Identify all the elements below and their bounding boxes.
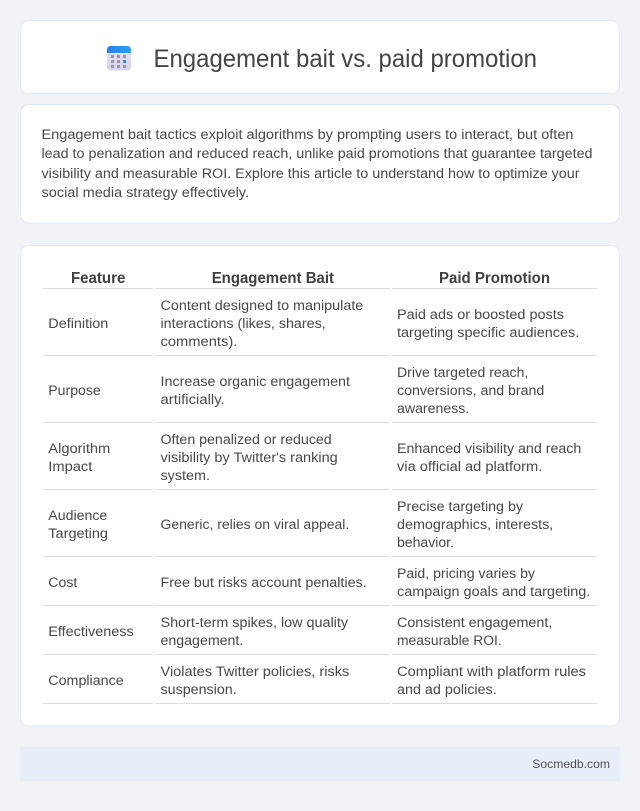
row: Effectiveness: Short-term spikes, low quality (160, 615, 349, 631)
row: Compliance: and ad policies. (397, 682, 497, 698)
footer credit: Socmedb.com (532, 757, 610, 771)
row: Algorithm Impact (43, 432, 597, 490)
row: Effectiveness: Effectiveness (48, 624, 134, 640)
intro text (42, 127, 592, 201)
row: Cost: Cost (48, 575, 77, 591)
row: Purpose (43, 365, 597, 423)
intro text: Engagement bait tactics exploit algorithms by prompting users to interact, but often (42, 127, 574, 143)
row: Effectiveness: measurable ROI. (397, 633, 502, 649)
row: Compliance: Violates Twitter policies, risks (160, 664, 349, 680)
icon: calendar (107, 46, 131, 70)
row: Definition: Paid ads or boosted posts (397, 307, 564, 323)
table header row: Paid Promotion (439, 270, 550, 287)
row: Definition: comments). (160, 334, 237, 350)
row: Cost: Free but risks account penalties. (160, 575, 367, 591)
footer (20, 747, 620, 781)
row: Audience Targeting: demographics, interests, (397, 517, 553, 533)
row: Algorithm Impact: via official ad platform. (397, 459, 542, 475)
row: Purpose: awareness. (397, 401, 469, 417)
panel: title card (20, 20, 620, 94)
row: Definition: targeting specific audiences. (397, 325, 579, 341)
row: Purpose: Drive targeted reach, (397, 365, 528, 381)
row: Audience Targeting (43, 499, 597, 557)
panel: comparison table (20, 246, 620, 726)
row: Algorithm Impact: Impact (48, 459, 92, 475)
row: Algorithm Impact: system. (160, 468, 210, 484)
row: Definition: interactions (likes, shares, (160, 316, 326, 332)
table header row (43, 270, 597, 289)
row: Compliance: Compliant with platform rules (397, 664, 586, 680)
row: Cost: Paid, pricing varies by (397, 566, 536, 582)
row: Effectiveness: engagement. (160, 633, 243, 649)
table header row: Feature (71, 270, 125, 287)
row: Algorithm Impact: Enhanced visibility and reach (397, 441, 581, 457)
row: Audience Targeting: Precise targeting by (397, 499, 524, 515)
row: Effectiveness: Consistent engagement, (397, 615, 552, 631)
row: Compliance (43, 664, 597, 704)
title: Engagement bait vs. paid promotion (154, 45, 537, 73)
row: Algorithm Impact: Often penalized or reduced (160, 432, 332, 448)
intro text: lead to penalization and reduced reach, unlike paid promotions that guarantee targeted (42, 146, 592, 162)
row: Audience Targeting: Targeting (48, 526, 108, 542)
table header row: Engagement Bait (212, 270, 335, 287)
intro text: visibility and measurable ROI. Explore this article to understand how to optimize your (42, 166, 580, 182)
row: Purpose: Purpose (48, 383, 101, 399)
row: Effectiveness (43, 615, 597, 655)
row: Cost: campaign goals and targeting. (397, 584, 590, 600)
panel: introduction (20, 104, 620, 223)
row: Cost (43, 566, 597, 606)
row: Definition: Content designed to manipulate (160, 298, 363, 314)
row: Purpose: Increase organic engagement (160, 374, 350, 390)
intro text: social media strategy effectively. (42, 185, 249, 201)
row: Compliance: Compliance (48, 673, 124, 689)
row: Definition: Definition (48, 316, 108, 332)
row: Algorithm Impact: visibility by Twitter's ranking (160, 450, 338, 466)
row: Purpose: artificially. (160, 392, 225, 408)
row: Audience Targeting: Audience (48, 508, 107, 524)
row: Algorithm Impact: Algorithm (48, 441, 110, 457)
row: Audience Targeting: Generic, relies on viral appeal. (160, 517, 349, 533)
row: Compliance: suspension. (160, 682, 237, 698)
row: Purpose: conversions, and brand (397, 383, 544, 399)
row: Audience Targeting: behavior. (397, 535, 454, 551)
row: Definition (43, 298, 597, 356)
